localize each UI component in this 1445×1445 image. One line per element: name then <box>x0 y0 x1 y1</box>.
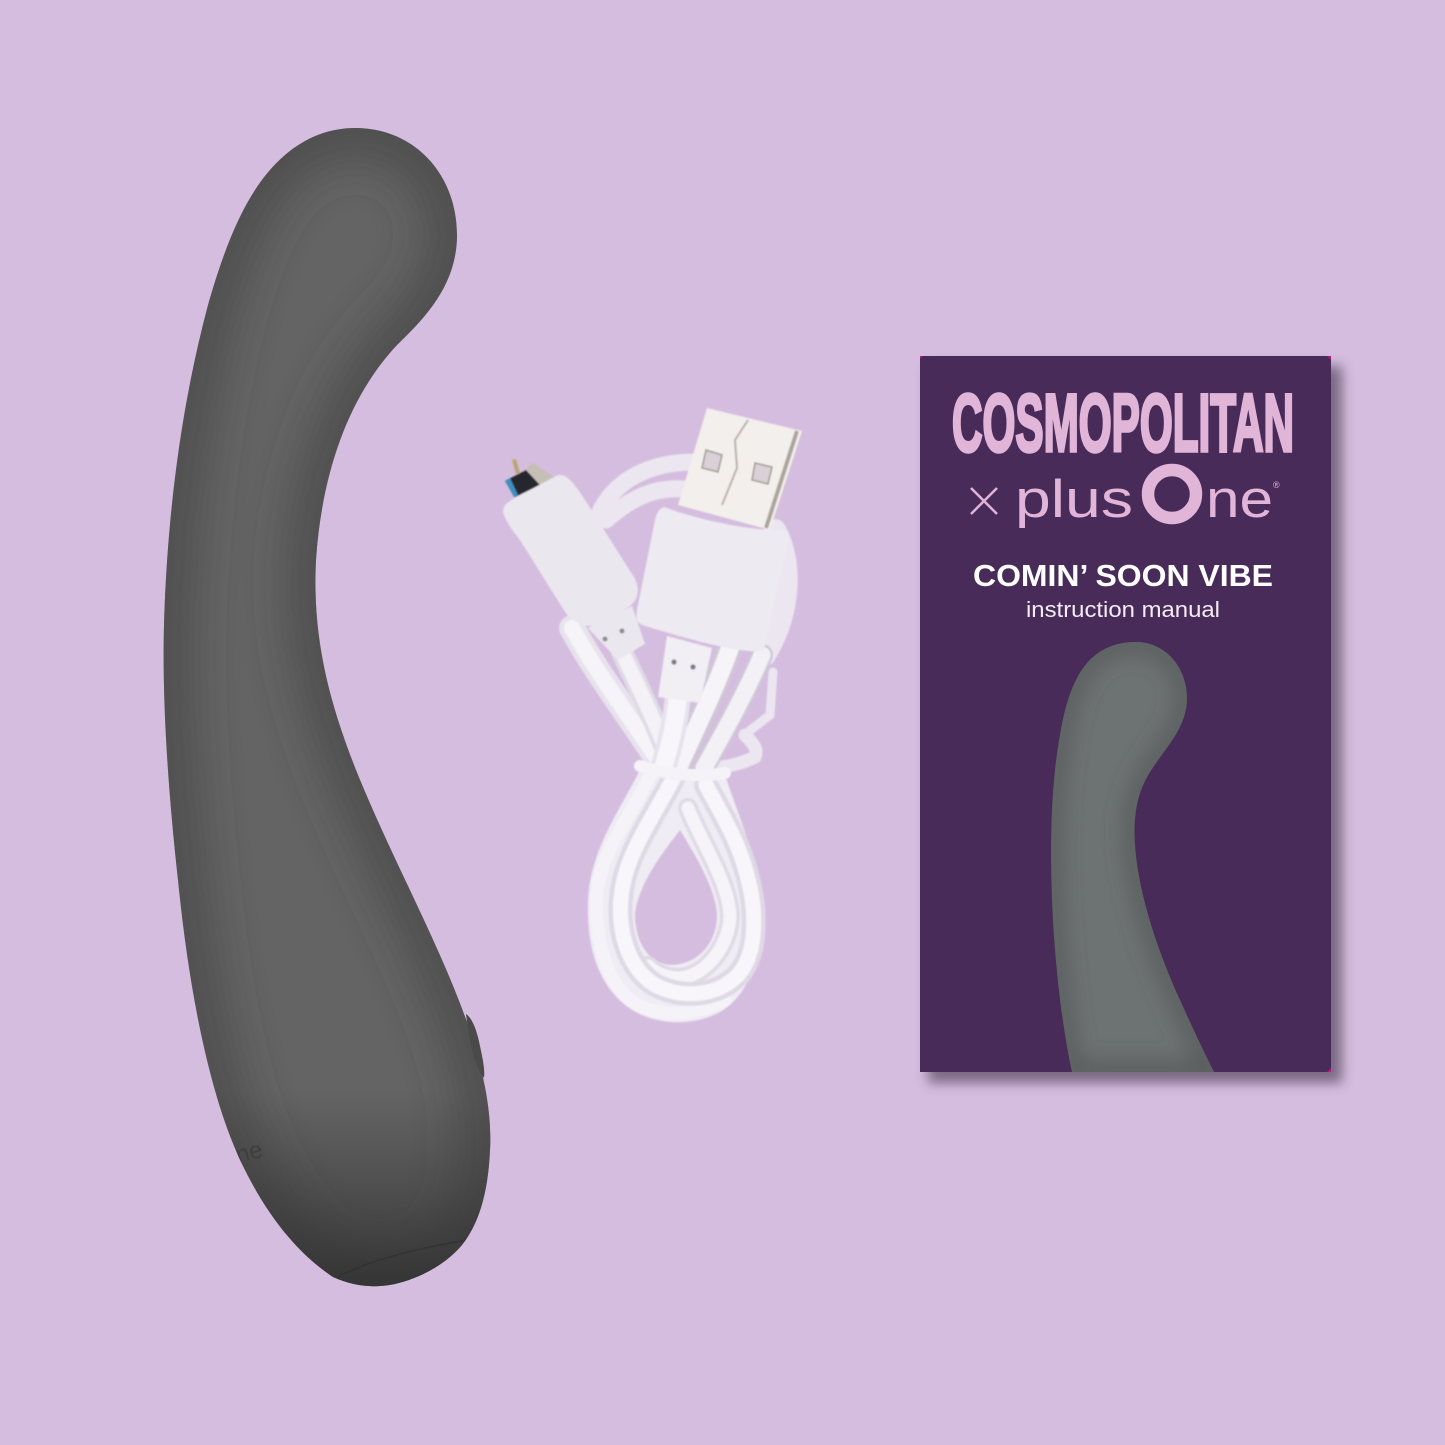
right strain relief <box>658 636 712 703</box>
USB metal plug <box>678 408 802 530</box>
card background <box>920 356 1331 1072</box>
card product image <box>1051 642 1214 1072</box>
embossed logo: ne <box>233 1136 265 1169</box>
subtitle: instruction manual <box>1026 597 1220 622</box>
cable loop silhouette <box>588 770 762 1022</box>
USB housing <box>637 507 788 651</box>
card shadow <box>928 366 1342 1083</box>
left strain relief <box>588 606 645 660</box>
corner trim marks <box>920 356 1331 1072</box>
vibrator product <box>150 128 510 1290</box>
plusOne logo: ® <box>1273 480 1280 490</box>
cable strands behind connectors <box>596 462 787 767</box>
magnetic connector metal tip <box>505 459 554 497</box>
product name: COMIN’ SOON VIBE <box>973 558 1273 593</box>
instruction manual card <box>920 356 1342 1083</box>
plusOne logo <box>1015 470 1280 529</box>
USB charging cable <box>503 408 802 1022</box>
side button <box>466 1014 484 1078</box>
plusOne logo: ne <box>1206 470 1273 529</box>
product box contents scene <box>164 128 1350 1286</box>
upper cable strands <box>572 628 762 768</box>
magnetic connector housing <box>503 475 638 626</box>
cable loop strand highlights <box>597 775 754 1013</box>
plusOne logo: plus <box>1015 470 1133 529</box>
times mark <box>971 488 997 514</box>
cable tie <box>640 766 725 775</box>
